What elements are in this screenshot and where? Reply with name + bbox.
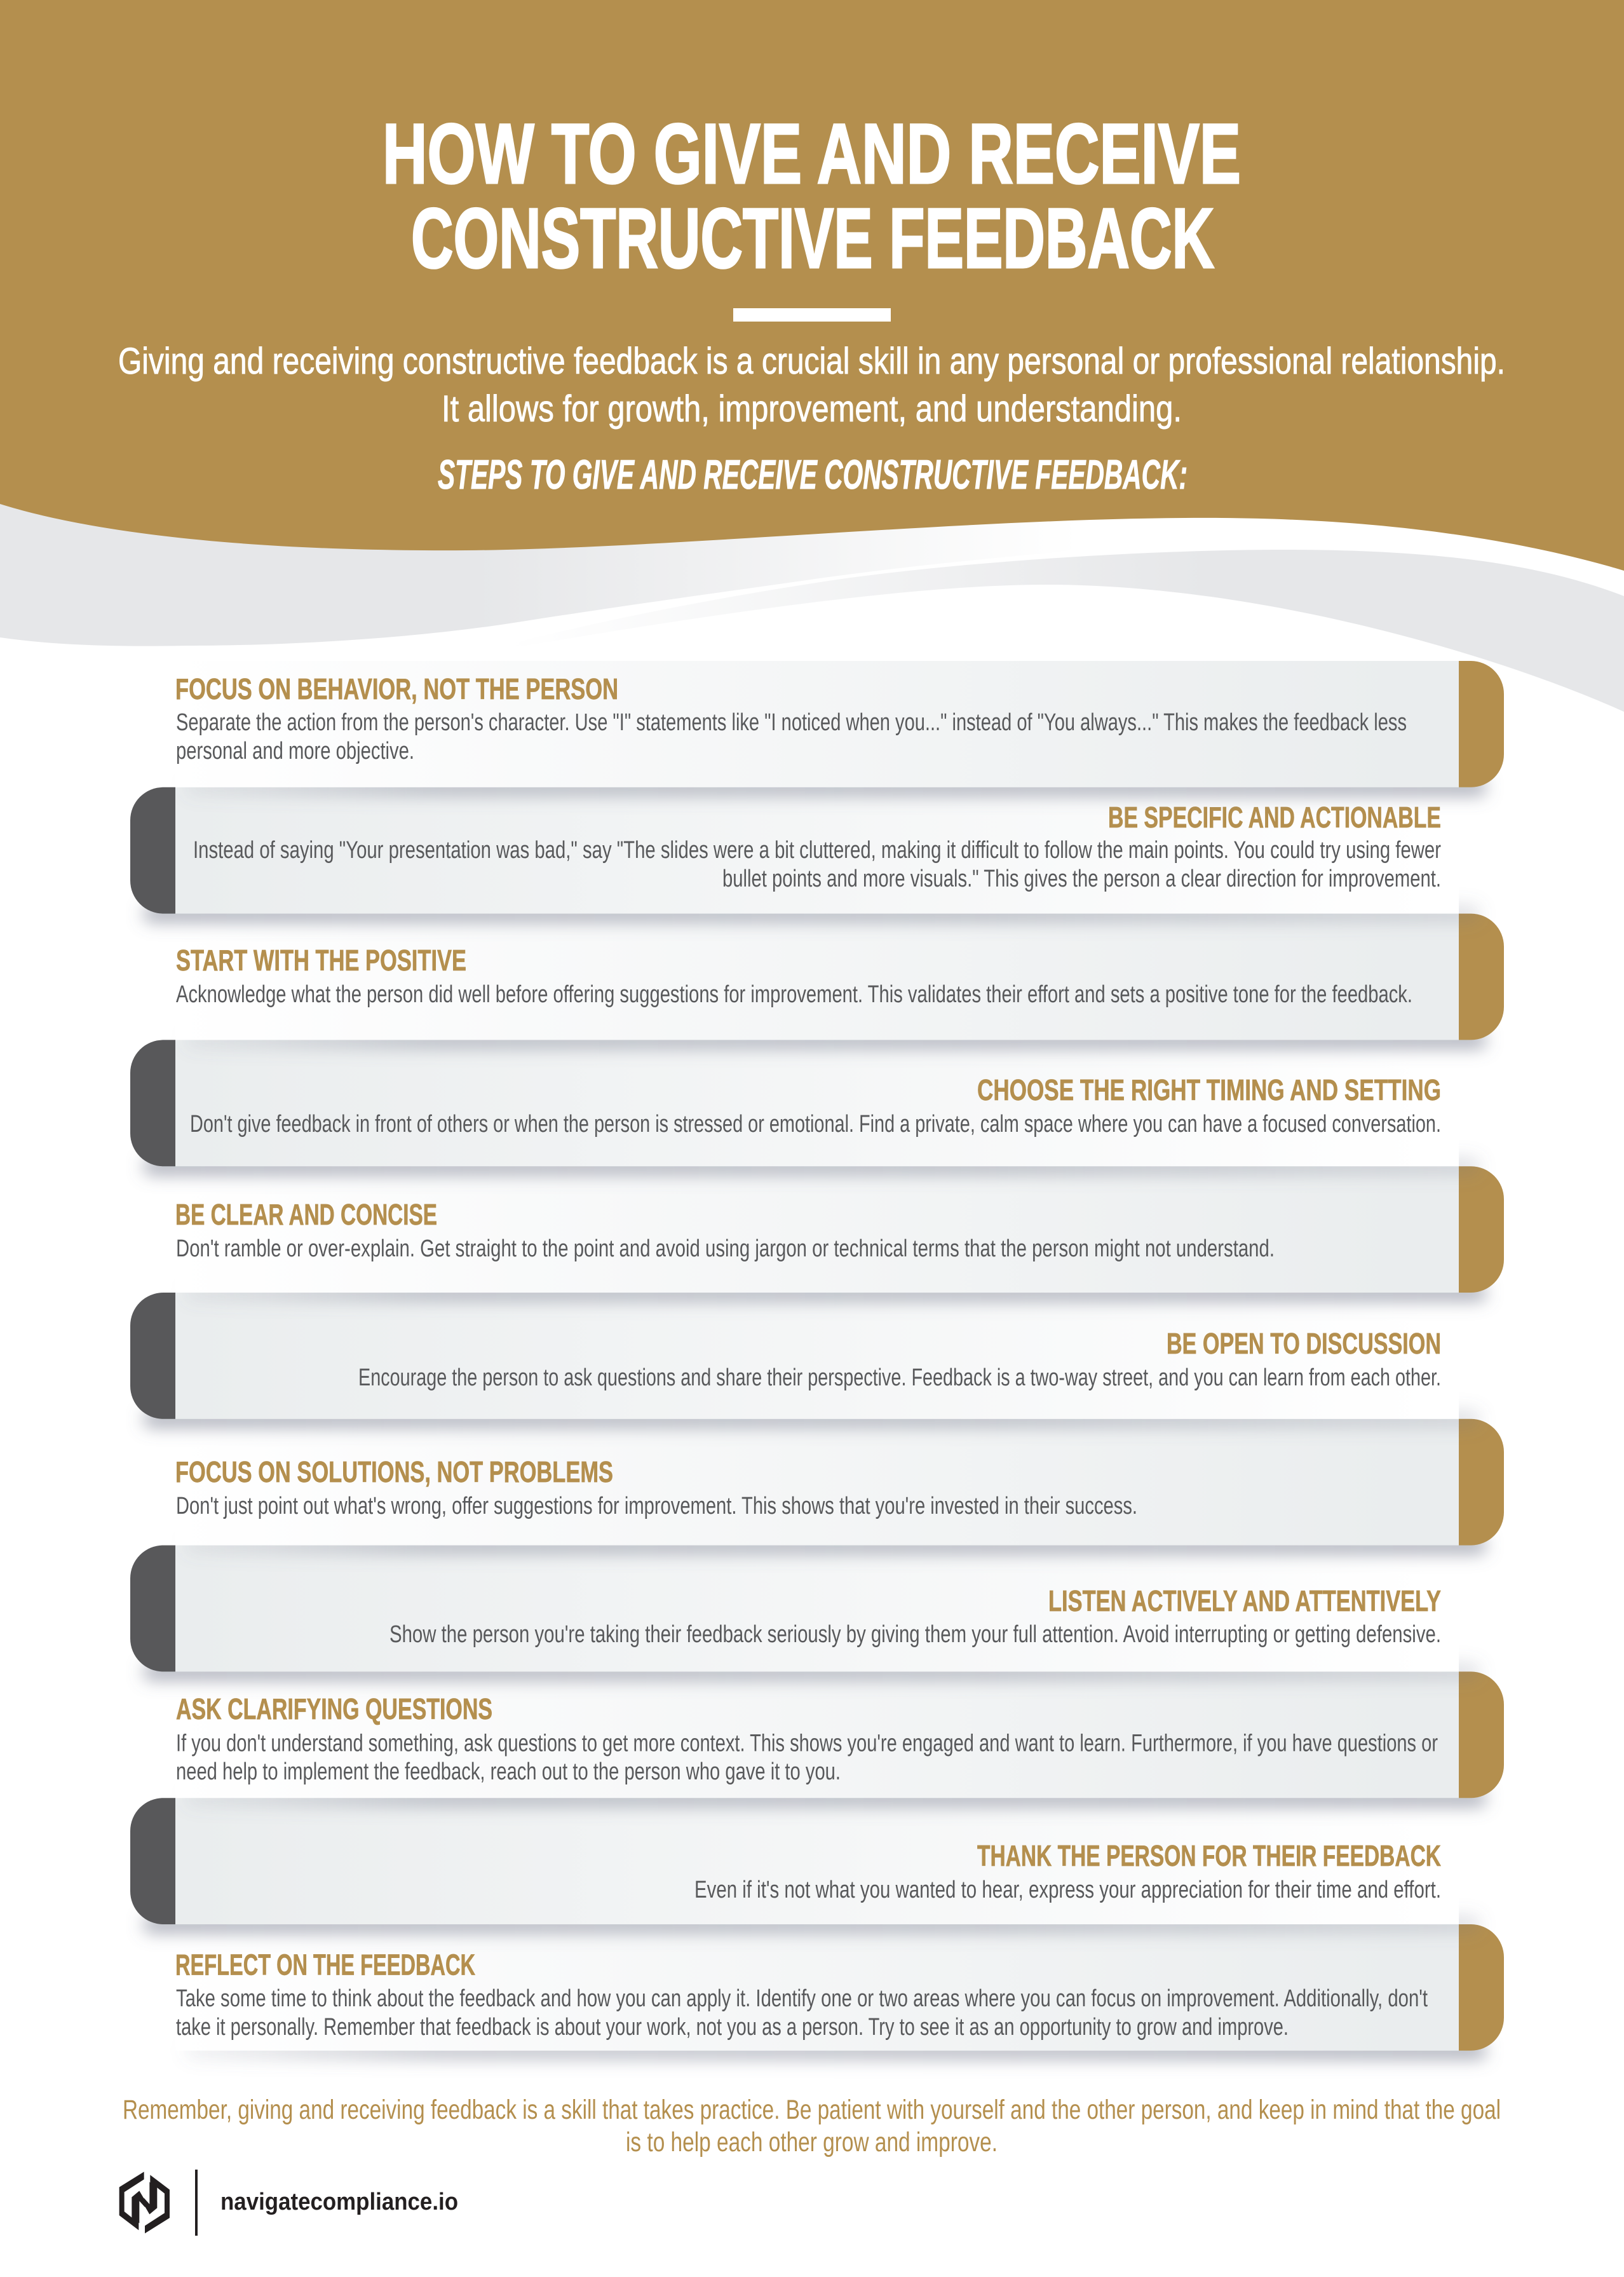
panel: step 11 reflect on the feedback: take it personally. Remember that feedback is about your work, not you as a person. Try to see it as an opportunity to grow and improve. bbox=[176, 2014, 1289, 2041]
section heading: STEPS TO GIVE AND RECEIVE CONSTRUCTIVE FEEDBACK: bbox=[438, 451, 1188, 498]
panel: step 5 be clear and concise: BE CLEAR AND CONCISE bbox=[175, 1198, 437, 1231]
intro text bbox=[118, 341, 1505, 430]
title underline bar bbox=[733, 308, 891, 322]
panel: step 7 focus on solutions: Don't just point out what's wrong, offer suggestions for improvement. This shows that you're invested in their success. bbox=[176, 1493, 1137, 1519]
panel: step 6 be open to discussion bbox=[130, 1293, 1459, 1419]
panel: step 2 be specific and actionable bbox=[130, 787, 1459, 914]
wave: right grey band bbox=[457, 550, 1624, 712]
header background bbox=[0, 0, 1624, 571]
panel: step 6 be open to discussion: BE OPEN TO DISCUSSION bbox=[1167, 1327, 1441, 1360]
panel: step 3 start with the positive bbox=[175, 914, 1504, 1040]
panel: step 7 focus on solutions bbox=[175, 1419, 1504, 1546]
panel: step 11 reflect on the feedback bbox=[175, 1924, 1504, 2051]
panel: step 2 be specific and actionable: BE SPECIFIC AND ACTIONABLE bbox=[1108, 801, 1441, 834]
panel: step 9 ask clarifying questions: ASK CLARIFYING QUESTIONS bbox=[176, 1692, 492, 1725]
panel: step 4 choose the right timing bbox=[130, 1040, 1459, 1166]
title bbox=[382, 107, 1241, 286]
panel: step 1 focus on behavior: FOCUS ON BEHAVIOR, NOT THE PERSON bbox=[175, 672, 618, 705]
title: CONSTRUCTIVE FEEDBACK bbox=[411, 191, 1214, 286]
panel: step 10 thank the person: THANK THE PERSON FOR THEIR FEEDBACK bbox=[977, 1839, 1441, 1872]
panel: step 10 thank the person bbox=[130, 1798, 1459, 1924]
panel: step 8 listen actively bbox=[130, 1546, 1459, 1671]
title: HOW TO GIVE AND RECEIVE bbox=[382, 107, 1241, 201]
closing note bbox=[123, 2095, 1501, 2158]
panel: step 3 start with the positive: START WITH THE POSITIVE bbox=[176, 944, 466, 977]
closing note: is to help each other grow and improve. bbox=[626, 2127, 998, 2158]
panel: step 9 ask clarifying questions bbox=[175, 1671, 1504, 1798]
panel: step 11 reflect on the feedback: REFLECT ON THE FEEDBACK bbox=[175, 1948, 475, 1981]
panel: step 5 be clear and concise: Don't ramble or over-explain. Get straight to the point and avoid using jargon or technical terms that the person might not understand. bbox=[176, 1235, 1275, 1262]
panel: step 7 focus on solutions: FOCUS ON SOLUTIONS, NOT PROBLEMS bbox=[175, 1455, 613, 1488]
icon: navigate compliance logo bbox=[119, 2172, 170, 2233]
panel: step 5 be clear and concise bbox=[175, 1166, 1504, 1293]
intro text: It allows for growth, improvement, and understanding. bbox=[442, 388, 1182, 430]
panel: step 4 choose the right timing: CHOOSE THE RIGHT TIMING AND SETTING bbox=[977, 1073, 1441, 1106]
panel: step 9 ask clarifying questions: need help to implement the feedback, reach out to the person who gave it to you. bbox=[176, 1758, 841, 1785]
panel: step 1 focus on behavior bbox=[175, 661, 1504, 787]
wave: left grey band bbox=[0, 496, 1239, 646]
panel: step 8 listen actively: LISTEN ACTIVELY AND ATTENTIVELY bbox=[1048, 1584, 1441, 1617]
panel: step 1 focus on behavior: personal and more objective. bbox=[176, 738, 414, 765]
logo wordmark: navigatecompliance.io bbox=[220, 2189, 458, 2215]
logo divider bbox=[195, 2170, 198, 2236]
